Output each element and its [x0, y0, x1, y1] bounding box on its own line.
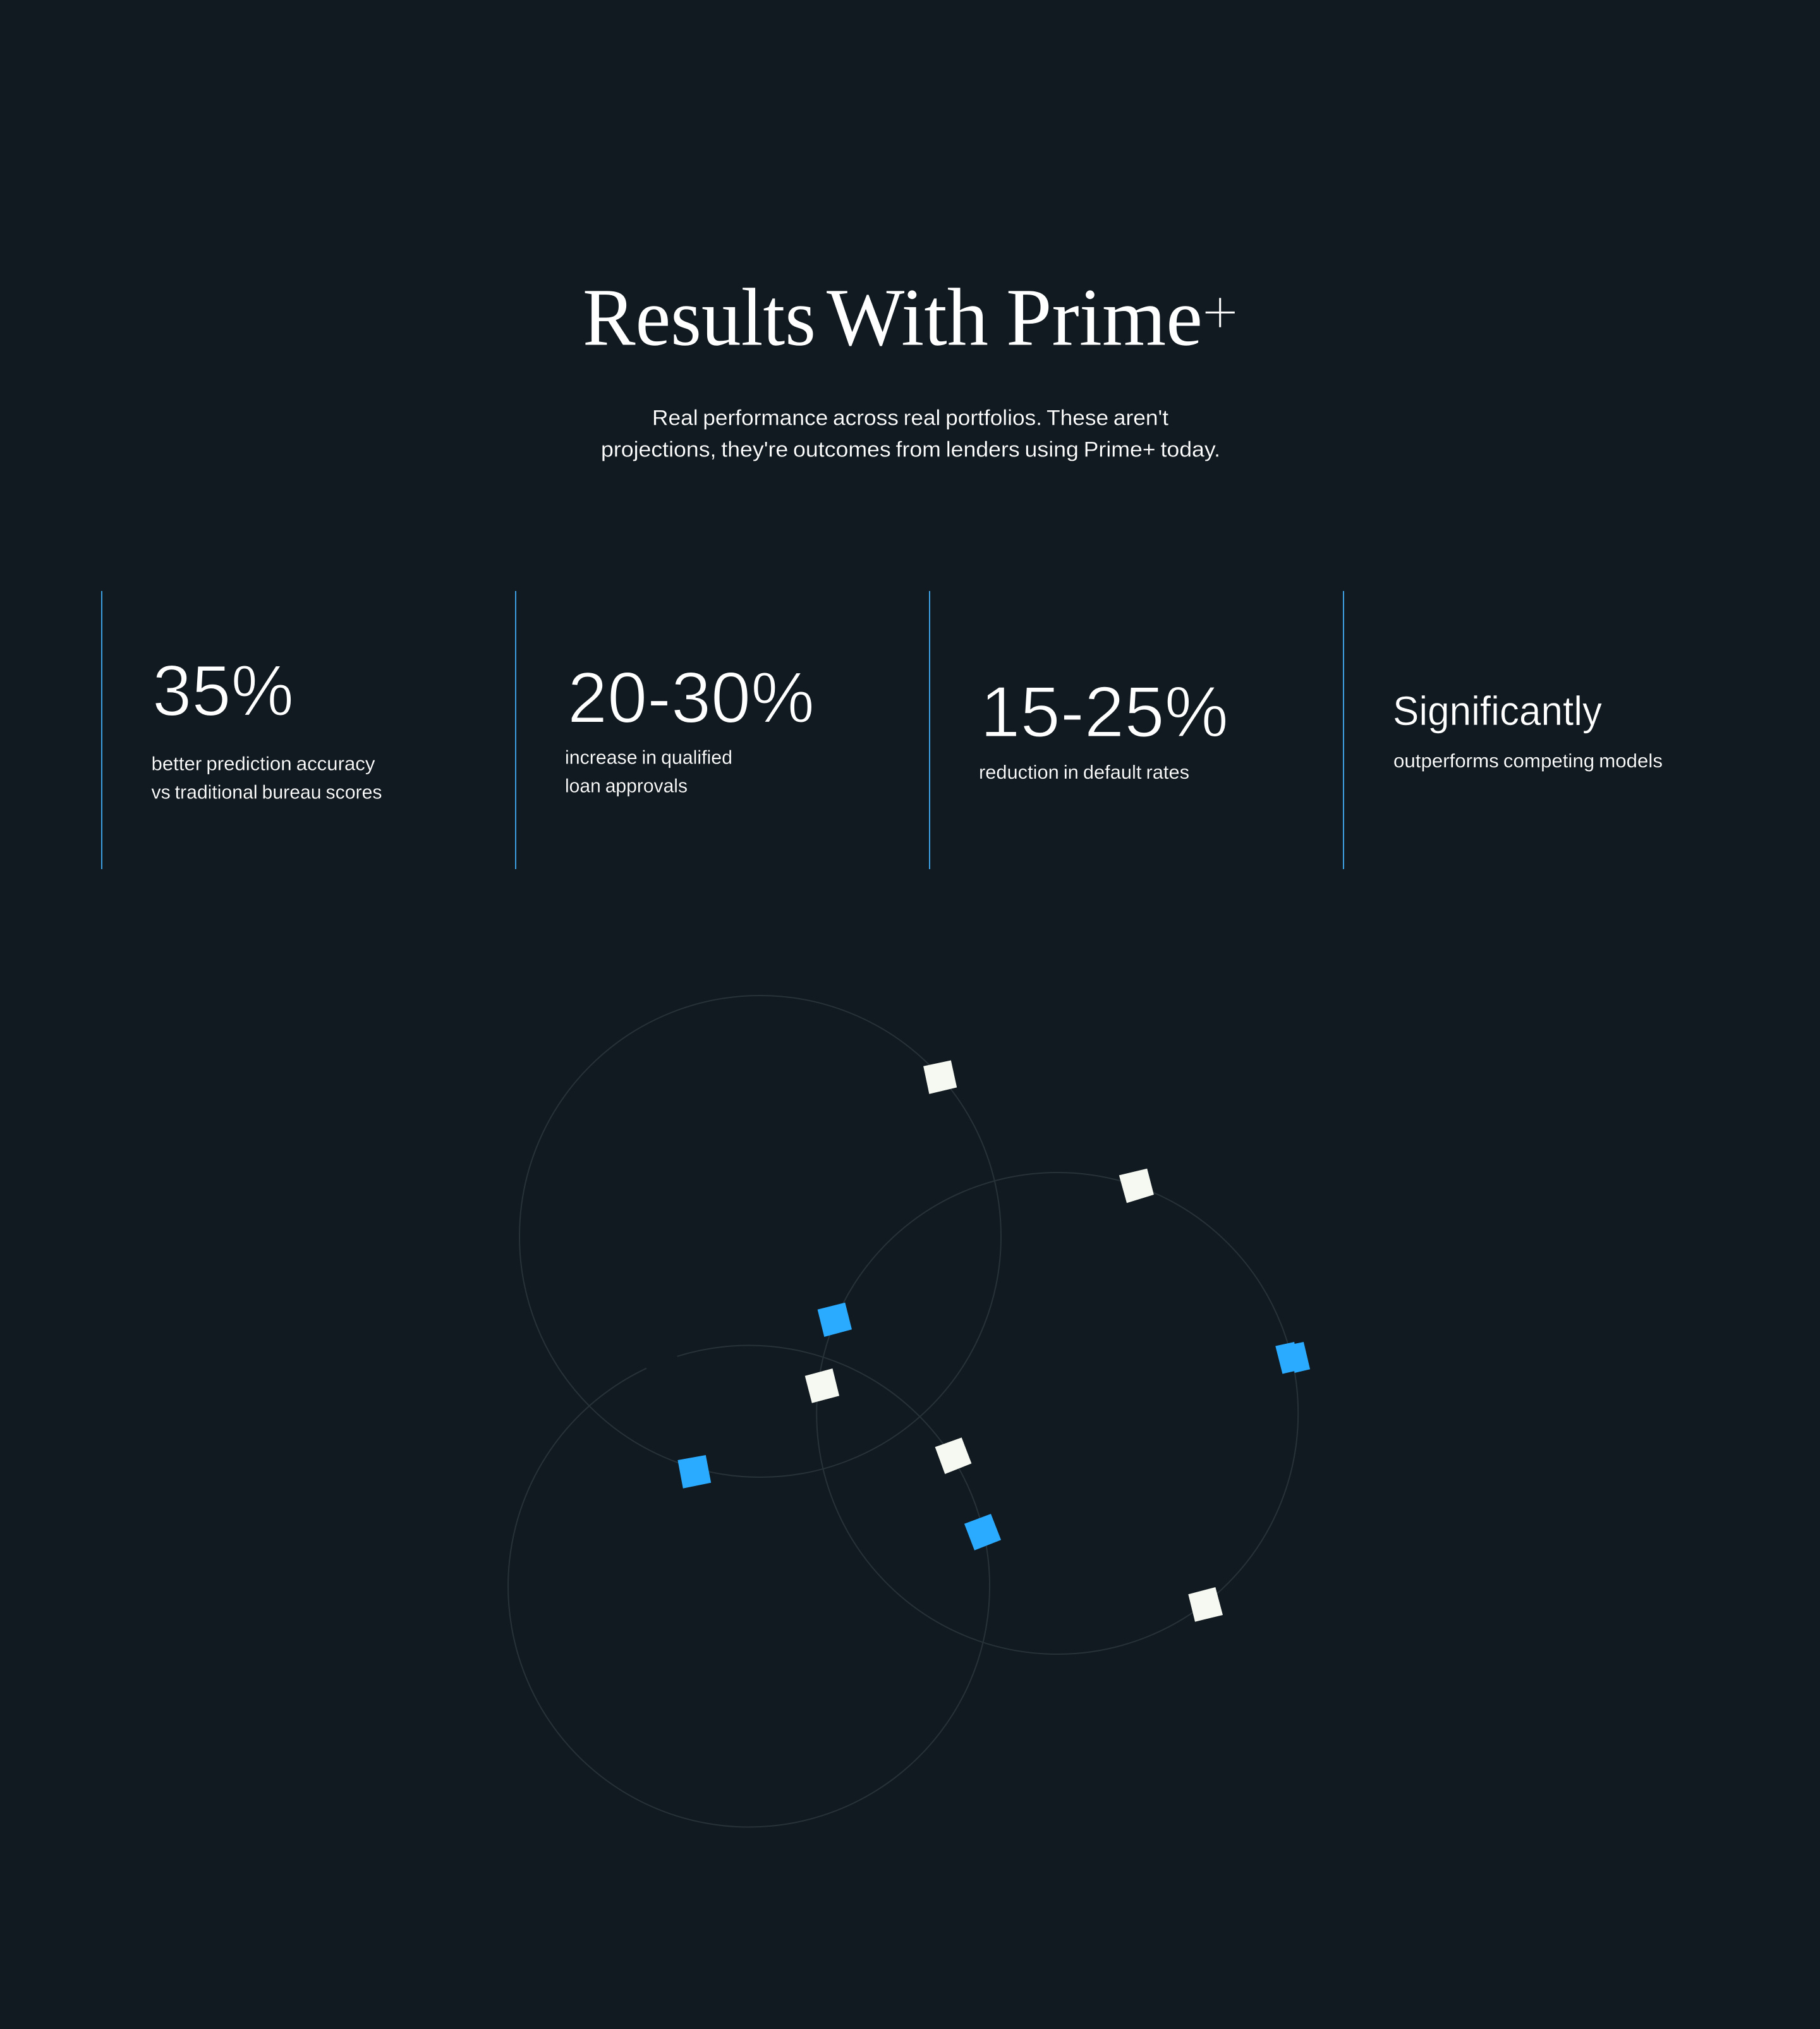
panel: stat 15-25%: reduction in default rates — [979, 761, 1189, 783]
node: blue lower centre — [964, 1514, 1001, 1551]
node: white top — [923, 1061, 957, 1094]
panel: stat 35% — [101, 591, 382, 869]
node: white lower centre — [935, 1437, 971, 1474]
panel: stat 15-25%: 15-25% — [980, 673, 1228, 752]
diagram: three overlapping circles with square nodes — [508, 996, 1310, 1827]
title: Prime — [1006, 272, 1203, 363]
panel: stat 35%: 35% — [152, 651, 294, 731]
panel: stat 20-30%: 20-30% — [567, 658, 815, 738]
panel: stat 35%: better prediction accuracy — [152, 752, 375, 775]
subtitle text block: Real performance across real portfolios. These aren't — [652, 406, 1169, 430]
panel: stat Significantly: Significantly — [1393, 688, 1602, 734]
node: white upper right — [1119, 1169, 1154, 1203]
node: blue left — [677, 1455, 711, 1489]
title — [583, 272, 1239, 363]
title: + — [1201, 276, 1239, 349]
panel: stat Significantly: outperforms competing models — [1393, 750, 1663, 772]
circle: right — [816, 1173, 1298, 1654]
subtitle text block — [601, 406, 1220, 461]
subtitle text block: projections, they're outcomes from lenders using Prime+ today. — [601, 437, 1220, 461]
title: With — [827, 272, 988, 363]
node: white centre — [805, 1368, 839, 1403]
panel: stat 15-25% — [929, 591, 1228, 869]
panel: stat 20-30% — [515, 591, 815, 869]
panel: stat 20-30%: increase in qualified — [565, 746, 732, 769]
node: blue centre — [818, 1303, 852, 1337]
panel: stat 20-30%: loan approvals — [565, 775, 688, 796]
panel: stat 35%: vs traditional bureau scores — [152, 781, 382, 803]
node: blue right double square — [1275, 1342, 1310, 1374]
panel: stat Significantly — [1343, 591, 1663, 869]
node: white bottom right — [1188, 1587, 1223, 1622]
circle: lower left with gap — [508, 1346, 990, 1827]
circle: upper left — [519, 996, 1001, 1477]
title: Results — [583, 272, 816, 363]
